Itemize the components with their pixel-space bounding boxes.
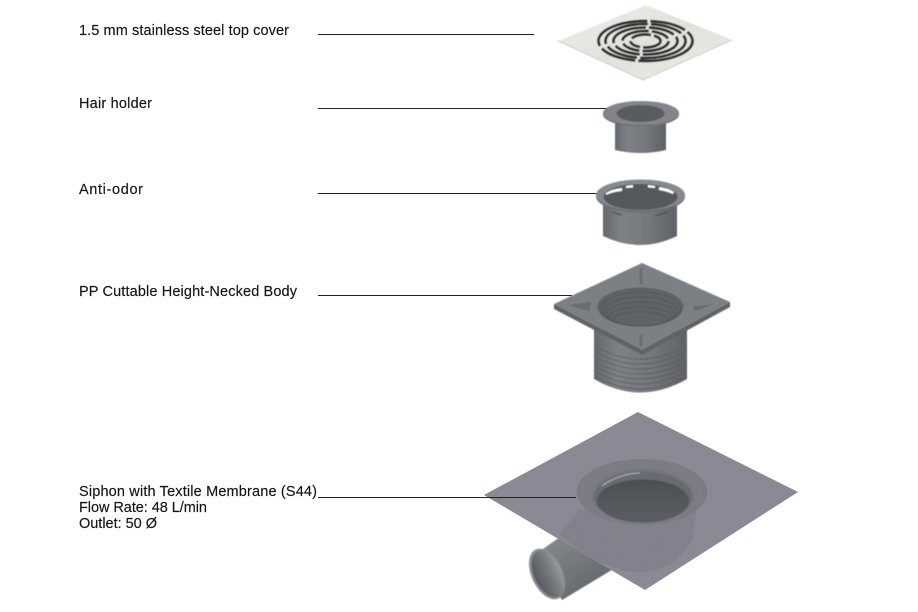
icon: hair holder bbox=[603, 101, 679, 153]
label: siphon specifications: Siphon with Textile Membrane (S44) bbox=[79, 484, 317, 500]
label: hair holder: Hair holder bbox=[79, 96, 152, 112]
label: PP body: PP Cuttable Height-Necked Body bbox=[79, 284, 298, 300]
icon: textile membrane bbox=[484, 412, 798, 590]
label: top cover: 1.5 mm stainless steel top cover bbox=[79, 23, 289, 39]
label: siphon specifications bbox=[79, 484, 576, 532]
label: siphon specifications: Flow Rate: 48 L/min bbox=[79, 500, 207, 516]
icon: stainless steel cover bbox=[558, 5, 732, 80]
icon: cuttable body bbox=[554, 263, 730, 392]
label: anti-odor: Anti-odor bbox=[79, 182, 143, 198]
label: siphon specifications: Outlet: 50 Ø bbox=[79, 516, 157, 532]
icon: siphon opening bbox=[576, 459, 708, 525]
icon: outlet pipe bbox=[522, 537, 620, 605]
icon: anti-odor ring bbox=[596, 180, 685, 245]
